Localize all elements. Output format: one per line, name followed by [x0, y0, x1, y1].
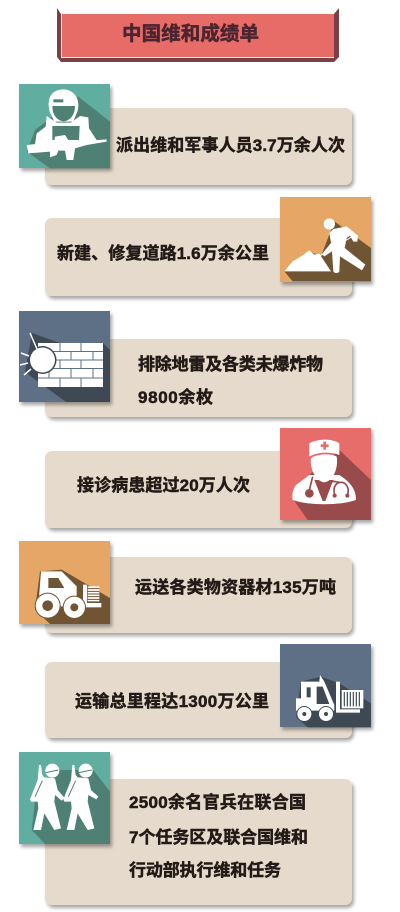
icon: road worker with shovel [280, 197, 371, 282]
icon: medic [280, 428, 371, 520]
panel: mines [19, 311, 352, 417]
icon: explosion behind wall [19, 311, 110, 402]
title banner [57, 8, 339, 62]
text: distance: 运输总里程达1300万公里 [75, 691, 269, 711]
text: mines: 排除地雷及各类未爆炸物 [138, 354, 323, 374]
icon: loader with cargo [19, 541, 110, 624]
panel: transport distance [45, 644, 371, 738]
title text: 中国维和成绩单 [122, 22, 259, 45]
text: supplies: 运送各类物资器材135万吨 [135, 577, 336, 597]
text: patients: 接诊病患超过20万人次 [77, 475, 250, 495]
icon: soldier with rifle [19, 84, 110, 168]
panel: patients [45, 428, 371, 528]
text: roads: 新建、修复道路1.6万余公里 [57, 243, 269, 263]
text: officers line 3: 行动部执行维和任务 [129, 860, 281, 880]
icon: forklift with container [280, 644, 371, 727]
text: officers line 2: 7个任务区及联合国维和 [129, 827, 308, 847]
panel: peacekeepers sent [19, 84, 352, 185]
text: mines count: 9800余枚 [138, 387, 213, 407]
icon: two marching soldiers [19, 752, 110, 844]
panel: roads [45, 197, 371, 296]
panel: supplies [19, 541, 352, 633]
text: personnel: 派出维和军事人员3.7万余人次 [116, 135, 345, 155]
panel: deployed officers [19, 752, 352, 905]
text: officers line 1: 2500余名官兵在联合国 [129, 792, 306, 812]
